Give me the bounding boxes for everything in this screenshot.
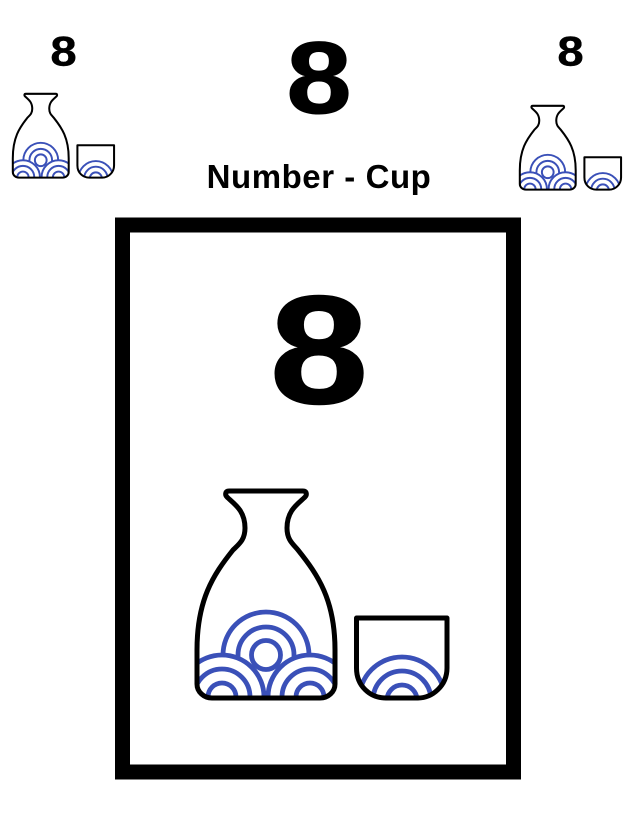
- icon: small sake set left: [6, 94, 114, 196]
- heading: Number - Cup: Number - Cup: [207, 158, 431, 195]
- top-right number: 8: [557, 29, 584, 75]
- title number: 8: [286, 22, 352, 135]
- top-left number: 8: [50, 29, 77, 75]
- card number: 8: [270, 265, 368, 436]
- icon: small sake set right: [513, 106, 621, 208]
- icon: large sake bottle and cup: [180, 491, 447, 743]
- panel: card frame: [122, 225, 514, 772]
